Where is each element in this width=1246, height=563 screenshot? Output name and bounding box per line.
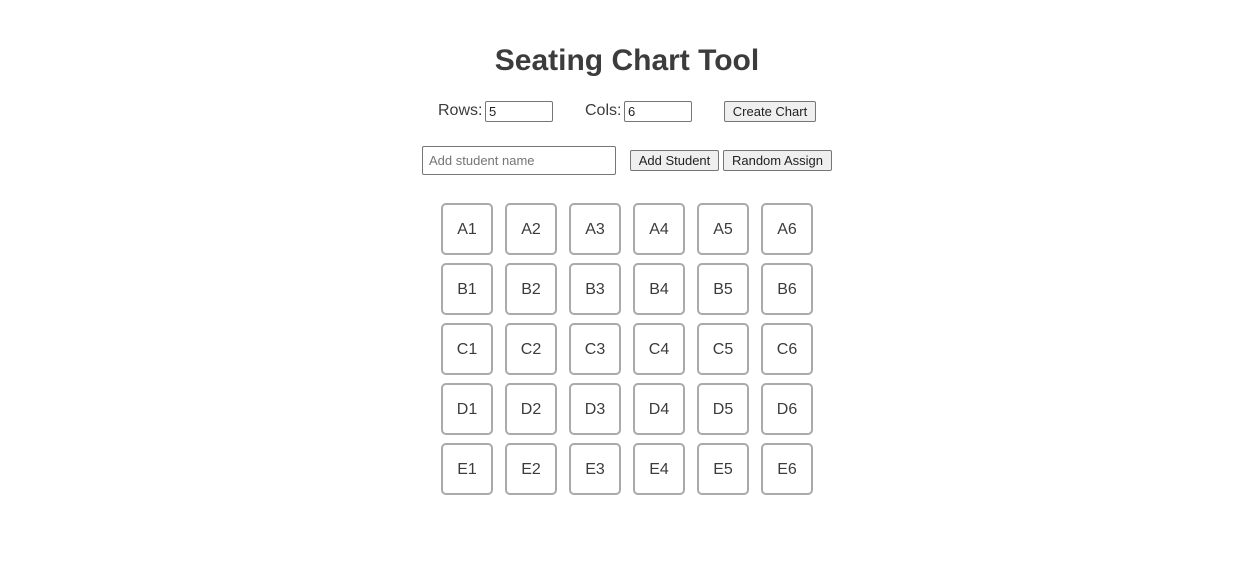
input: cols: 6 [628, 104, 635, 119]
seat grid: B6 [777, 281, 797, 298]
seat grid: C5 [713, 341, 733, 358]
label: cols: Cols: [585, 102, 621, 119]
seat grid: C3 [585, 341, 605, 358]
seat grid: C1 [457, 341, 477, 358]
seat grid: B1 [457, 281, 477, 298]
seat grid: D4 [649, 401, 669, 418]
seat grid: D1 [457, 401, 477, 418]
seat grid: C6 [777, 341, 797, 358]
controls: rows/cols [438, 101, 816, 122]
input: rows [485, 101, 553, 122]
seat grid: B2 [521, 281, 541, 298]
title: Seating Chart Tool [495, 44, 759, 77]
seat grid: C4 [649, 341, 669, 358]
seat grid: A2 [521, 221, 541, 238]
seat grid: A6 [777, 221, 797, 238]
seat grid: A3 [585, 221, 605, 238]
button: create chart: Create Chart [733, 104, 807, 119]
input: student name [422, 146, 616, 175]
seat grid [441, 203, 813, 495]
seat grid: D6 [777, 401, 797, 418]
seat grid: D3 [585, 401, 605, 418]
seat grid: E1 [457, 461, 477, 478]
seat grid: E3 [585, 461, 605, 478]
button: add student: Add Student [639, 153, 710, 168]
seat grid: B3 [585, 281, 605, 298]
input: student name: Add student name [429, 153, 535, 168]
seat grid: B4 [649, 281, 669, 298]
button: random assign: Random Assign [732, 153, 823, 168]
button: add student [630, 150, 719, 171]
seat grid: A4 [649, 221, 669, 238]
input: cols [624, 101, 692, 122]
seat grid: A1 [457, 221, 477, 238]
button: random assign [723, 150, 832, 171]
seat grid: E5 [713, 461, 733, 478]
seat grid: E2 [521, 461, 541, 478]
seat grid: B5 [713, 281, 733, 298]
seat grid: C2 [521, 341, 541, 358]
button: create chart [724, 101, 816, 122]
seat grid: A5 [713, 221, 733, 238]
seat grid: D5 [713, 401, 733, 418]
seat grid: D2 [521, 401, 541, 418]
controls: students [422, 146, 832, 175]
seat grid: E4 [649, 461, 669, 478]
seat grid: E6 [777, 461, 797, 478]
input: rows: 5 [489, 104, 496, 119]
label: rows: Rows: [438, 102, 482, 119]
